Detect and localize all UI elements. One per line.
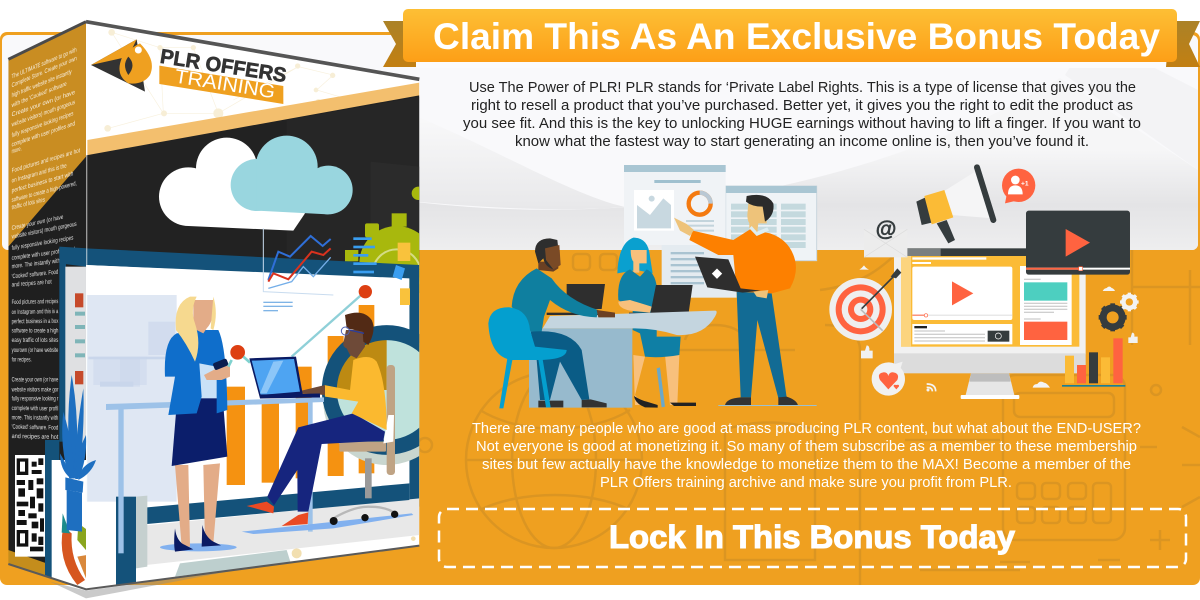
box side text: Create your own (or have — [12, 376, 59, 383]
gear labels and sticky notes — [353, 237, 410, 305]
box side text: Complete Store. Create your own — [12, 55, 77, 89]
icon: target with arrow — [829, 268, 901, 341]
box side text: yourown (or have website — [12, 347, 59, 354]
desktop monitor — [894, 248, 1086, 399]
ribbon: right tail — [1166, 21, 1200, 67]
video player — [1026, 211, 1130, 275]
screen interior — [86, 265, 409, 507]
icon: heart bubble — [872, 362, 905, 396]
box side text: easy traffic of lots sites — [12, 337, 58, 344]
box side text: Create your own (or have — [12, 214, 64, 232]
person: man at desk — [488, 238, 615, 408]
box side text: software to create a high-powered, — [12, 180, 77, 204]
icon: new follower bubble: +1 — [1021, 180, 1029, 187]
plant on box corner — [60, 375, 96, 532]
icon: email envelope — [864, 217, 907, 257]
text block: body paragraph: Not everyone is good at monetizing it. So many of them subscribe as a member to these membership — [476, 438, 1137, 455]
box side text: fully responsive looking recipes — [12, 110, 74, 139]
screen band — [86, 248, 419, 507]
box side text: more. The instantly with — [12, 258, 60, 270]
box side text: more. — [12, 145, 22, 155]
box side text: 'Cooked' software. Food — [12, 424, 59, 432]
QR code — [15, 455, 45, 557]
icon: blue cloud — [231, 136, 353, 214]
person: standing woman — [165, 297, 250, 552]
text block: body paragraph: PLR Offers training archive and make sure you profit from PLR. — [600, 474, 1012, 491]
box side text: on Instagram and this is a — [12, 308, 59, 316]
desk — [106, 397, 324, 553]
box side text: complete with user profil — [12, 405, 58, 412]
box dark band — [86, 95, 419, 270]
box side text: perfect business in a box — [12, 318, 59, 325]
network pattern — [108, 32, 348, 128]
line chart — [263, 228, 333, 295]
gear — [345, 186, 420, 293]
logo wordmark: PLR OFFERS — [159, 46, 288, 87]
text block: intro paragraph: you see fit. And this is the key to unlocking HUGE earnings without having to lift a finger. If you want to — [463, 115, 1141, 132]
box side text: more. This instantly with — [12, 414, 59, 422]
box top edges — [8, 22, 419, 589]
wall shelf — [87, 295, 177, 502]
call to action button: Lock In This Bonus Today — [609, 519, 1015, 555]
person: seated woman with laptop — [247, 313, 398, 526]
box side text: 'Cooked' software. Food — [12, 269, 59, 280]
box side text: software to create a high — [12, 328, 59, 335]
person: woman at desk — [617, 238, 696, 408]
box side text: complete with user profiles and — [12, 120, 75, 149]
bar chart — [1062, 338, 1125, 387]
box side text: with the 'Cooked' software — [11, 80, 67, 110]
floor — [148, 498, 420, 565]
icon: clouds — [859, 265, 1115, 388]
call to action button — [439, 509, 1186, 567]
text block: intro paragraph — [463, 79, 1141, 150]
front window with chart — [624, 165, 726, 245]
text block: body paragraph: sites but few actually have the knowledge to monetize them to the MAX! Become a member of the — [482, 456, 1131, 473]
box side text: and recipes are hot — [12, 278, 52, 289]
text block: intro paragraph: know what the fastest way to start generating an income online is, then you’ve found it. — [515, 133, 1089, 150]
box side text: perfect business to start with — [12, 170, 74, 195]
pie chart piece — [62, 527, 85, 585]
icon: thumbs up left — [861, 345, 873, 358]
logo — [91, 39, 288, 104]
title: Claim This As An Exclusive Bonus Today — [433, 16, 1160, 57]
icon: email envelope: @ — [876, 217, 896, 241]
icon: new follower bubble — [1002, 169, 1035, 203]
box side text: website visitors make gor — [11, 386, 58, 393]
front highlights — [86, 140, 88, 502]
icon: thumbs up right — [1128, 333, 1138, 343]
icon: rss — [927, 384, 936, 391]
box orange strip — [87, 83, 419, 155]
ribbon: left tail — [383, 21, 416, 67]
side band — [45, 440, 59, 580]
box side text: on Instagram and this is the — [12, 162, 67, 185]
text block: intro paragraph: right to resell a product that you’ve purchased. Better yet, it gives you the right to edit the product as — [471, 97, 1133, 114]
box side text: for recipes. — [12, 356, 32, 363]
desk — [529, 311, 717, 408]
box shadow — [50, 571, 233, 598]
floor line — [718, 405, 817, 406]
box side text: complete with user profiles and — [12, 246, 75, 262]
box left face — [8, 20, 88, 593]
box side text: traffic of lots sites — [12, 196, 45, 211]
text block: body paragraph: There are many people who are good at mass producing PLR content, but what about the END-USER? — [472, 420, 1141, 437]
icon: dark gear — [1099, 303, 1127, 331]
white panel top under ribbon — [416, 60, 1166, 68]
box side text: high traffic website site instantly — [12, 68, 72, 99]
box side text: website visitors) mouth gorgeous — [11, 99, 75, 129]
person: presenter — [674, 195, 798, 405]
box side text: and recipes are hot — [12, 433, 59, 441]
illustration: team meeting — [488, 165, 817, 408]
box side text: Food pictures and recipes — [12, 298, 58, 306]
box side text: Create your own (or have — [12, 89, 75, 119]
box side text: Food pictures and recipes are hot — [12, 147, 80, 175]
logo: TRAINING — [173, 66, 277, 103]
donut chart — [322, 325, 420, 465]
back window with table — [726, 186, 817, 261]
text block: intro paragraph: Use The Power of PLR! PLR stands for ‘Private Label Rights. This is a type of license that gives you the — [469, 79, 1136, 96]
box front face — [86, 29, 420, 585]
floor shadows — [160, 543, 237, 551]
icon: light gear — [1120, 293, 1139, 311]
background line pattern — [418, 250, 1200, 585]
illustration: online marketing — [829, 167, 1139, 399]
icon: white cloud — [159, 138, 305, 231]
box side text: fully responsive looking recipes — [12, 235, 73, 252]
icon: megaphone — [916, 167, 993, 243]
title ribbon — [403, 9, 1177, 62]
rising line with dot — [263, 285, 372, 357]
box side text: fully responsive looking r — [12, 396, 58, 403]
lower panel — [662, 245, 737, 298]
box side text — [11, 46, 80, 441]
box side text: website visitors) mouth gorgeous — [11, 221, 77, 241]
text block: body paragraph — [472, 420, 1141, 491]
box side text: The ULTIMATE software to go with — [12, 46, 77, 81]
bar chart on screen — [227, 305, 374, 485]
product box — [8, 20, 450, 598]
